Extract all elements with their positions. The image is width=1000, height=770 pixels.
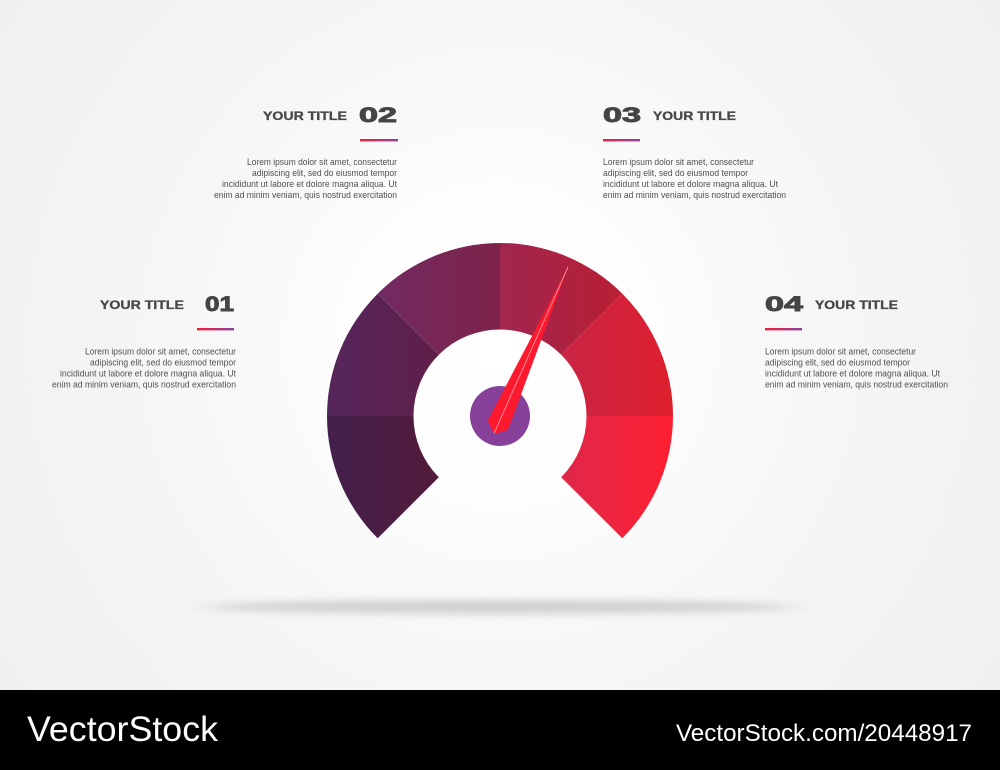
text 04: adipiscing elit, sed do eiusmod tempor [765, 358, 910, 368]
block 04 [765, 293, 948, 390]
text 01: Lorem ipsum dolor sit amet, consectetur [85, 346, 236, 358]
text 04: incididunt ut labore et dolore magna aliqua. Ut [765, 368, 940, 380]
title 04: YOUR TITLE [815, 300, 898, 312]
title 01: YOUR TITLE [100, 300, 184, 312]
text 03: enim ad minim veniam, quis nostrud exercitation [603, 190, 786, 201]
text 03: adipiscing elit, sed do eiusmod tempor [603, 168, 748, 179]
text 02 [214, 157, 397, 201]
text 01: enim ad minim veniam, quis nostrud exercitation [52, 380, 236, 390]
text 02: adipiscing elit, sed do eiusmod tempor [252, 168, 397, 179]
gauge hub [470, 386, 530, 446]
segment 3 [378, 243, 500, 355]
title 03: YOUR TITLE [653, 111, 736, 123]
text 03 [603, 157, 786, 201]
text 02: incididunt ut labore et dolore magna aliqua. Ut [222, 179, 397, 190]
segment 5 [561, 294, 673, 416]
text 01 [52, 346, 236, 390]
text 01: adipiscing elit, sed do eiusmod tempor [90, 358, 236, 368]
ground shadow [205, 600, 795, 614]
footer bar [0, 690, 1000, 770]
block 02 [214, 104, 398, 201]
text 01: incididunt ut labore et dolore magna aliqua. Ut [60, 368, 236, 380]
number 01: 01 [205, 293, 234, 316]
text 04 [765, 346, 948, 390]
number 02: 02 [359, 104, 397, 127]
gauge dial [327, 243, 673, 538]
block 01 [52, 293, 236, 390]
text 04: Lorem ipsum dolor sit amet, consectetur [765, 346, 916, 358]
gauge needle [488, 267, 568, 434]
footer logo text: VectorStock [27, 710, 219, 749]
text 03: Lorem ipsum dolor sit amet, consectetur [603, 157, 754, 168]
number 04: 04 [765, 293, 804, 316]
segment 2 [327, 294, 439, 416]
segment 4 [500, 243, 622, 355]
text 04: enim ad minim veniam, quis nostrud exercitation [765, 380, 948, 390]
title 02: YOUR TITLE [263, 111, 347, 123]
segment 1 [327, 416, 439, 538]
text 02: enim ad minim veniam, quis nostrud exercitation [214, 190, 397, 201]
segment 6 [561, 416, 673, 538]
block 03 [603, 104, 786, 201]
number 03: 03 [603, 104, 641, 127]
text 02: Lorem ipsum dolor sit amet, consectetur [247, 157, 397, 168]
text 03: incididunt ut labore et dolore magna aliqua. Ut [603, 179, 778, 190]
footer url text: VectorStock.com/20448917 [676, 720, 972, 747]
